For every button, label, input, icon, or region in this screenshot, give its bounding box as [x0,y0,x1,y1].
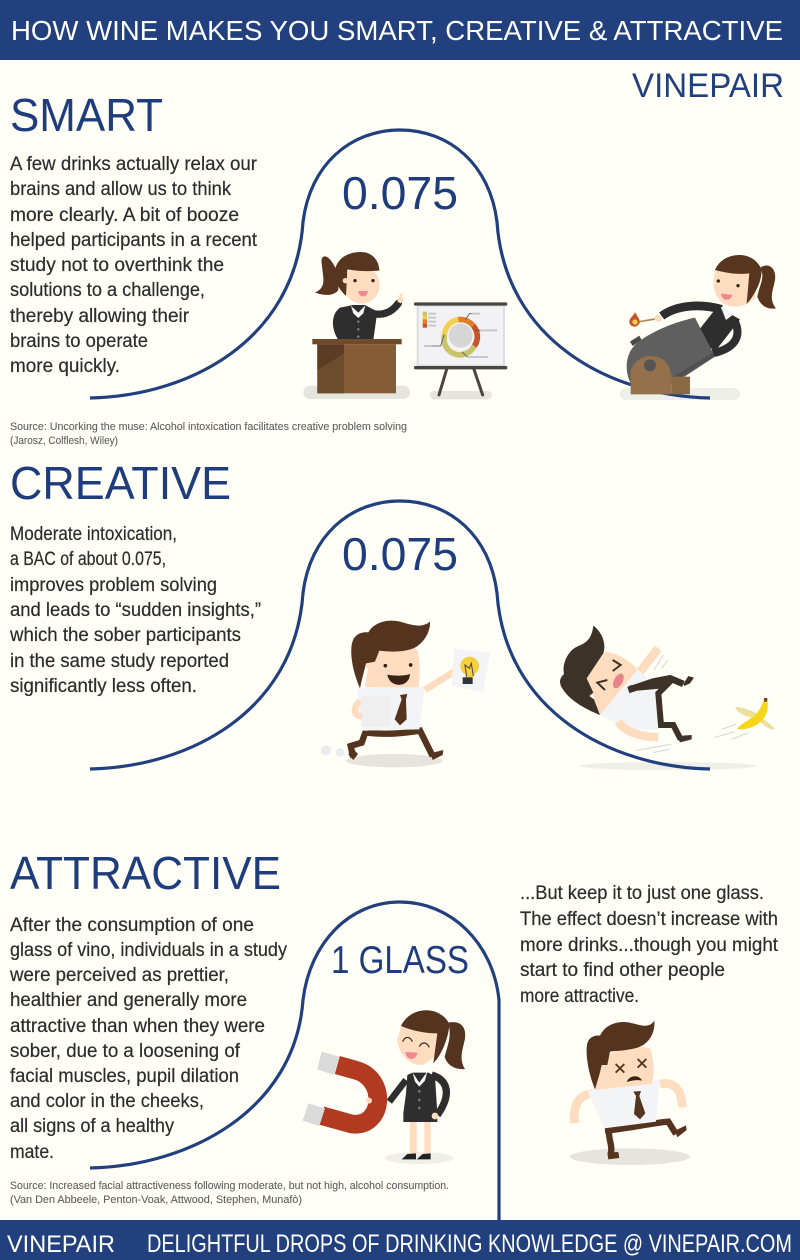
right text block: more attractive. [520,986,639,1007]
right text block: start to find other people [520,960,725,981]
illustration: woman lighting cannon [627,255,776,394]
smart heading: SMART [10,89,163,141]
attractive text block: After the consumption of one [10,915,254,936]
attractive text block: and color in the cheeks, [10,1091,204,1112]
attractive text block: facial muscles, pupil dilation [10,1066,239,1087]
title banner [0,0,800,60]
creative value: 0.075 [342,528,458,580]
attractive text block: glass of vino, individuals in a study [10,940,287,961]
shadow: slipping man [579,762,757,770]
attractive text block: were perceived as prettier, [9,965,229,986]
creative text block: significantly less often. [10,676,197,697]
smart text block: helped participants in a recent [10,230,258,251]
creative text block: and leads to “sudden insights,” [10,600,261,621]
illustration: presenter at desk with chart [303,252,507,399]
right text block: more drinks...though you might [520,935,779,956]
illustration: man slipping on banana [560,626,775,753]
smart source: Source: Uncorking the muse: Alcohol intoxication facilitates creative problem solving [10,421,407,433]
illustration: tipsy man [570,1021,690,1165]
smart text block: A few drinks actually relax our [10,154,258,175]
footer logo: VINEPAIR [7,1231,115,1258]
creative text block: in the same study reported [10,651,229,672]
creative bell curve [90,501,710,769]
illustration: woman with magnet [303,1010,465,1164]
title banner: HOW WINE MAKES YOU SMART, CREATIVE & ATTRACTIVE [11,15,783,46]
attractive text block: healthier and generally more [10,990,247,1011]
attractive source [10,1180,449,1206]
attractive curve [90,902,499,1220]
attractive value: 1 GLASS [331,939,469,982]
attractive text block: all signs of a healthy [10,1116,174,1137]
attractive text block: sober, due to a loosening of [10,1041,241,1062]
right text block: The effect doesn’t increase with [520,909,778,930]
smart text block: solutions to a challenge, [10,280,205,301]
right text block: ...But keep it to just one glass. [520,883,764,904]
attractive text block: attractive than when they were [10,1016,265,1037]
attractive text block [9,915,287,1163]
smart text block: more quickly. [10,356,120,377]
smart text block: study not to overthink the [10,255,224,276]
creative text block [9,524,261,697]
creative text block: improves problem solving [10,575,217,596]
smart text block: more clearly. A bit of booze [10,205,239,226]
smart value: 0.075 [342,167,458,219]
smart text block: brains and allow us to think [10,179,231,200]
smart text block: thereby allowing their [10,306,190,327]
smart source: (Jarosz, Colflesh, Wiley) [10,435,118,447]
footer bar [0,1220,800,1260]
smart text block [10,154,258,377]
attractive heading: ATTRACTIVE [10,847,281,899]
illustration: running man with idea [321,621,490,767]
attractive text block: mate. [10,1142,54,1163]
creative heading: CREATIVE [10,457,231,509]
creative text block: a BAC of about 0.075, [10,549,166,570]
creative text block: Moderate intoxication, [10,524,177,545]
smart bell curve [90,130,710,398]
smart text block: brains to operate [10,331,148,352]
smart source [10,421,407,447]
shadow: cannon [620,388,740,400]
creative text block: which the sober participants [9,625,241,646]
attractive source: Source: Increased facial attractiveness following moderate, but not high, alcohol consumption. [10,1180,449,1192]
VinePair logo: VINEPAIR [632,67,784,105]
right text block [520,883,779,1007]
attractive source: (Van Den Abbeele, Penton-Voak, Attwood, Stephen, Munafò) [10,1194,302,1206]
